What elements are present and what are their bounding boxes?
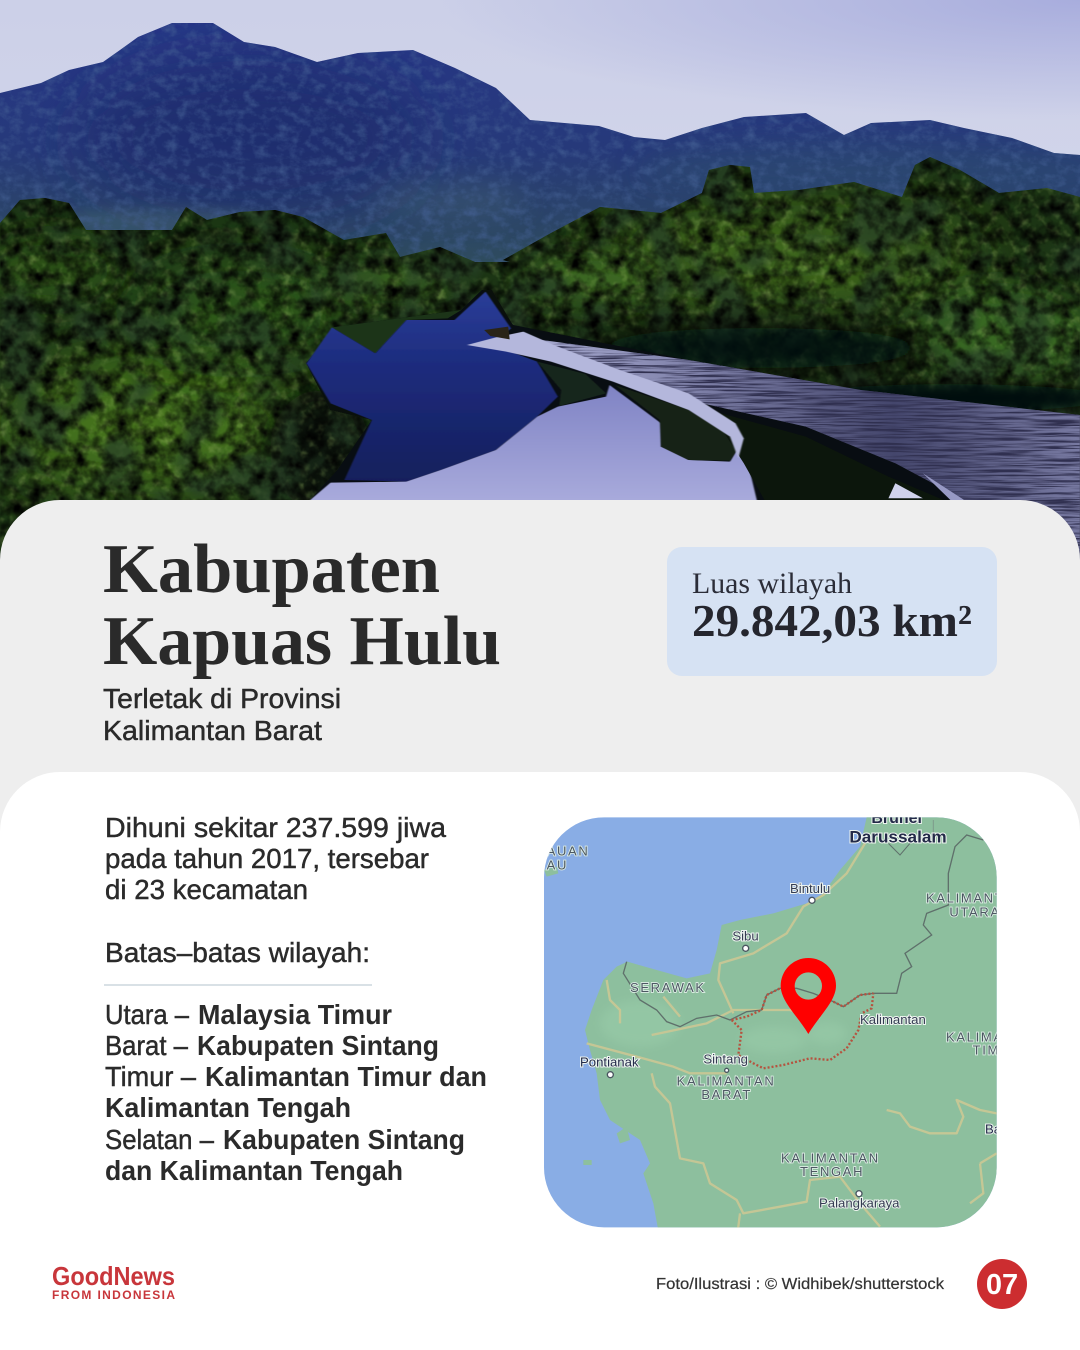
text block: population and borders: pada tahun 2017, tersebar — [105, 843, 429, 874]
text block: population and borders: Malaysia Timur — [198, 999, 392, 1030]
title: Kapuas Hulu — [103, 603, 501, 680]
labels: KALIMANTAN — [677, 1074, 775, 1089]
labels: KALIMANT — [926, 891, 1004, 906]
text block: population and borders: Barat – — [105, 1030, 188, 1061]
water backdrop — [0, 262, 1080, 592]
card: area: 29.842,03 km² — [692, 595, 972, 646]
text block: population and borders: Utara – — [105, 999, 189, 1030]
land tones — [600, 1000, 847, 1053]
subtitle — [103, 683, 341, 746]
photo: river and mountains — [0, 0, 1080, 600]
labels: Brunei — [871, 810, 922, 827]
page number: 07 — [986, 1269, 1018, 1301]
labels: KALIMA — [946, 1029, 1004, 1044]
text block: population and borders: dan Kalimantan Tengah — [105, 1155, 403, 1186]
labels: Sintang — [703, 1052, 748, 1067]
text block: population and borders: Kabupaten Sintang — [197, 1030, 439, 1061]
labels: Kalimantan — [860, 1012, 926, 1027]
title — [103, 531, 501, 680]
labels — [547, 810, 1004, 1210]
subtitle: Kalimantan Barat — [103, 715, 322, 746]
text block: population and borders: Selatan – — [105, 1124, 214, 1155]
title: Kabupaten — [103, 531, 440, 608]
logo: GoodNews from Indonesia — [52, 1261, 175, 1302]
page number — [977, 1259, 1027, 1309]
labels: BARAT — [701, 1087, 752, 1102]
regency outline — [732, 988, 873, 1068]
city dots — [607, 897, 862, 1197]
card: area: Luas wilayah — [692, 567, 852, 600]
mountains — [0, 23, 1080, 262]
river water — [306, 290, 1080, 577]
text block: population and borders: Kalimantan Tengah — [105, 1092, 351, 1123]
labels: Darussalam — [849, 827, 947, 846]
labels: AUAN — [547, 844, 589, 859]
labels: Ba — [985, 1121, 1002, 1136]
labels: SERAWAK — [630, 980, 706, 995]
icon: location pin — [781, 958, 836, 1034]
panel: grey title panel — [0, 500, 1080, 860]
photo credit: Foto/Ilustrasi : © Widhibek/shutterstock — [656, 1276, 944, 1293]
logo: GoodNews from Indonesia: FROM INDONESIA — [52, 1288, 175, 1302]
boat wake — [530, 338, 1080, 570]
labels: TENGAH — [800, 1164, 864, 1179]
text block: population and borders: Timur – — [105, 1061, 196, 1092]
labels: UTARA — [949, 904, 1001, 919]
text block: population and borders: Kalimantan Timur dan — [205, 1061, 487, 1092]
card: area — [667, 547, 997, 676]
text block: population and borders: di 23 kecamatan — [105, 874, 308, 905]
text block: population and borders: Batas–batas wilayah: — [105, 937, 370, 968]
labels: Bintulu — [790, 881, 830, 896]
map — [544, 817, 997, 1228]
labels: KALIMANTAN — [781, 1150, 880, 1165]
labels: TIM — [973, 1043, 1000, 1058]
forest banks — [0, 157, 1080, 556]
text block: population and borders — [104, 812, 487, 1186]
text block: population and borders: Kabupaten Sintang — [223, 1124, 465, 1155]
labels: Pontianak — [580, 1055, 639, 1070]
province border — [623, 835, 983, 1027]
labels: AU — [547, 857, 568, 872]
roads — [587, 843, 997, 1240]
boat — [484, 327, 510, 339]
labels: Sibu — [732, 929, 759, 944]
logo: GoodNews from Indonesia: GoodNews — [52, 1261, 175, 1291]
labels: Palangkaraya — [819, 1195, 900, 1210]
panel: white content panel — [0, 772, 1080, 1350]
subtitle: Terletak di Provinsi — [103, 683, 341, 714]
land — [585, 810, 1010, 1240]
text block: population and borders: Dihuni sekitar 237.599 jiwa — [105, 812, 446, 843]
